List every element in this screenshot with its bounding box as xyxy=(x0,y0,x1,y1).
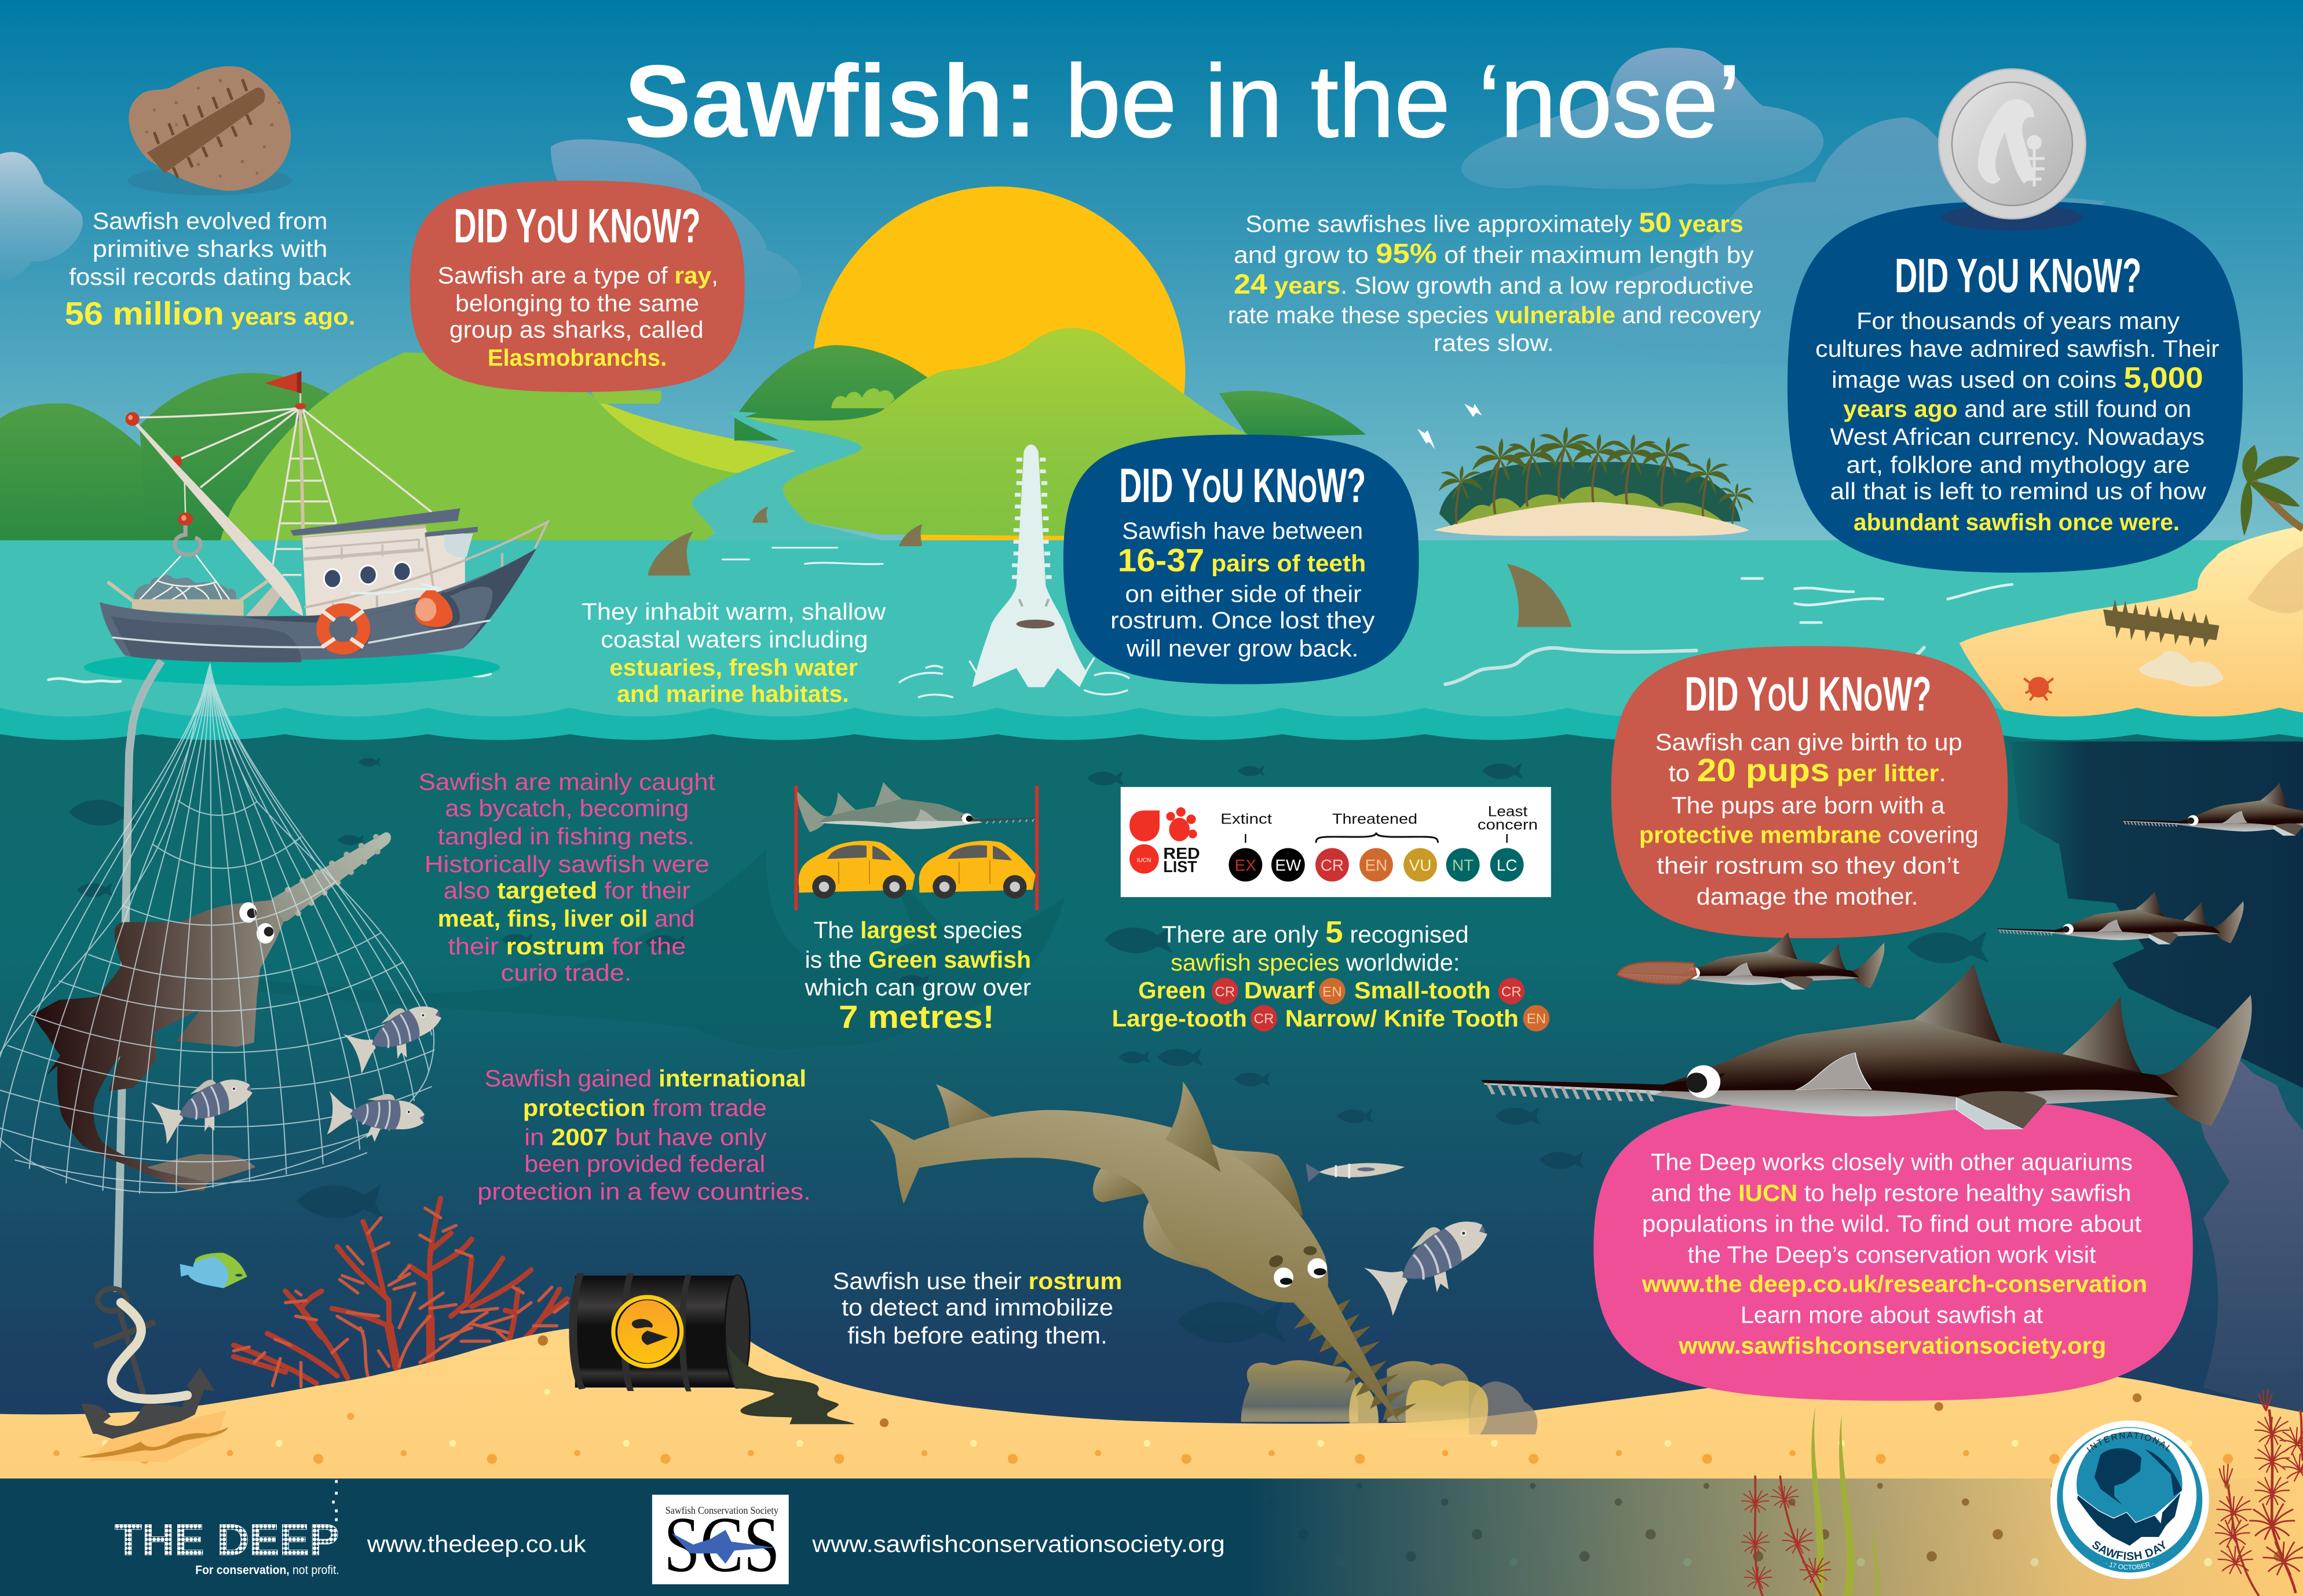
text: fossil records xyxy=(65,208,356,331)
text: rostrum use xyxy=(833,1268,1122,1349)
red list legend: EN xyxy=(1365,856,1387,874)
badge: international sawfish day: SAWFISH DAY xyxy=(2092,1540,2165,1560)
rope xyxy=(118,661,162,1292)
text: bycatch: meat, fins, liver oil and xyxy=(438,905,694,932)
text: bycatch: curio trade. xyxy=(501,960,631,986)
panel: did you know teeth: on either side of their xyxy=(1125,581,1362,607)
text: largest species: 7 metres! xyxy=(839,999,995,1035)
red list legend xyxy=(1121,787,1551,897)
red list legend: EW xyxy=(1275,856,1302,874)
rostrum fossil on beach xyxy=(2103,599,2219,647)
text: rostrum use: Sawfish use their rostrum xyxy=(833,1268,1122,1294)
panel: did you know coins: West African currency. Nowadays xyxy=(1830,423,2205,450)
rocks xyxy=(2138,651,2224,687)
text: largest species: The largest species xyxy=(814,917,1022,943)
text: protection: protection in a few countries. xyxy=(477,1178,811,1205)
sand speckles xyxy=(0,1329,2303,1596)
island xyxy=(1434,427,1754,536)
text: five species: CR xyxy=(1215,984,1235,1000)
palm shadow on beach xyxy=(2247,546,2303,613)
logo: the deep xyxy=(115,1480,339,1577)
text: fossil records: primitive sharks with xyxy=(93,236,327,262)
badge: international sawfish day xyxy=(2050,1421,2209,1579)
text: bycatch: their rostrum for the xyxy=(448,933,686,960)
text: protection: been provided federal xyxy=(524,1150,765,1177)
panel: did you know teeth: 16-37 pairs of teeth xyxy=(1118,542,1366,578)
text: lifespan: rate make these species vulnerable and recovery xyxy=(1228,302,1761,328)
text: bycatch: tangled in fishing nets. xyxy=(438,823,694,850)
text: bycatch xyxy=(419,768,715,986)
panel: did you know coins: For thousands of years many xyxy=(1856,308,2180,334)
oil spill xyxy=(728,1345,854,1424)
crab xyxy=(2024,677,2053,700)
green sawfish xyxy=(869,1082,1417,1423)
panel: did you know ray: Elasmobranchs. xyxy=(488,344,667,371)
panel: did you know ray: DID YOU KNOW? xyxy=(454,198,701,252)
footer band xyxy=(0,1478,2303,1596)
text: lifespan: and grow to 95% of their maximum length by xyxy=(1234,238,1754,269)
text: bycatch: Sawfish are mainly caught xyxy=(419,768,715,795)
text: protection xyxy=(477,1065,811,1205)
panel: did you know pups: to 20 pups per litter . xyxy=(1669,752,1946,788)
right beach xyxy=(1960,526,2303,719)
red list legend: Threatened xyxy=(1332,811,1417,827)
large sawfish xyxy=(1482,964,2252,1129)
text: habitats xyxy=(582,598,886,707)
panel: did you know pups: DID YOU KNOW? xyxy=(1684,667,1931,721)
red list legend: NT xyxy=(1452,856,1474,874)
panel: did you know pups: damage the mother. xyxy=(1697,883,1918,910)
panel: the deep conservation: the The Deep’s conservation work visit xyxy=(1688,1241,2096,1268)
text: lifespan: Some sawfishes live approximately 50 years xyxy=(1245,207,1743,239)
red list legend: LIST xyxy=(1163,858,1197,876)
clouds xyxy=(0,47,2106,365)
text: fossil records: 56 million years ago. xyxy=(65,295,356,331)
text: protection: in 2007 but have only xyxy=(524,1124,767,1151)
underwater background xyxy=(0,734,2303,1483)
panel: did you know pups: Sawfish can give birth to up xyxy=(1655,729,1962,756)
badge: international sawfish day: · 17 OCTOBER · xyxy=(2106,1562,2154,1569)
panel: did you know coins: cultures have admired sawfish. Their xyxy=(1815,335,2219,362)
panel: did you know coins: all that is left to remind us of how xyxy=(1830,478,2206,504)
sun xyxy=(812,186,1185,559)
text: habitats: coastal waters including xyxy=(601,626,868,653)
panel: did you know teeth: DID YOU KNOW? xyxy=(1119,458,1366,513)
text: protection: Sawfish gained international xyxy=(485,1065,806,1092)
fins in water xyxy=(648,507,1571,627)
red list legend: VU xyxy=(1409,856,1431,874)
panel: did you know pups: The pups are born with a xyxy=(1672,792,1945,819)
blue-grey reef xyxy=(2193,1060,2303,1417)
panel: the deep conservation: The Deep works closely with other aquariums xyxy=(1651,1149,2133,1176)
red list legend: concern xyxy=(1478,817,1538,833)
panel: the deep conservation: www.sawfishconservationsociety.org xyxy=(1678,1333,2106,1359)
seagulls xyxy=(1417,404,1482,449)
panel: did you know coins: art, folklore and mythology are xyxy=(1846,451,2190,478)
panel: did you know coins: image was used on coins 5,000 xyxy=(1832,361,2203,394)
coral xyxy=(233,1199,567,1386)
text: bycatch: Historically sawfish were xyxy=(425,851,710,877)
red list legend: Extinct xyxy=(1220,811,1272,827)
logo: the deep: THE DEEP xyxy=(115,1516,339,1565)
panel: did you know coins: abundant sawfish once were. xyxy=(1854,508,2180,535)
sea surface xyxy=(0,540,2303,746)
fishing net xyxy=(0,664,435,1194)
logo: sawfish conservation society: Sawfish Conservation Society xyxy=(666,1505,778,1516)
logo: the deep: For conservation, not profit. xyxy=(195,1562,339,1577)
panel: did you know teeth: Sawfish have between xyxy=(1122,518,1363,544)
coin xyxy=(1939,69,2086,219)
text: largest species: which can grow over xyxy=(805,974,1031,1001)
oil barrel xyxy=(569,1273,750,1392)
sawfish caught in net xyxy=(32,832,391,1191)
water ripples xyxy=(49,548,2012,684)
big shadow silhouette of sawfish xyxy=(257,848,1065,1050)
footer url: the deep: www.thedeep.co.uk xyxy=(367,1531,587,1557)
small sharks xyxy=(1617,783,2303,990)
text: fossil records: Sawfish evolved from xyxy=(93,208,327,235)
text: five species: CR xyxy=(1501,984,1522,1000)
wave bands xyxy=(0,708,2303,756)
anchor xyxy=(79,1288,229,1462)
text: five species: sawfish species worldwide: xyxy=(1171,949,1460,976)
sawfish rostrum breaching xyxy=(899,445,1129,697)
panel: did you know teeth xyxy=(1063,434,1419,684)
red water plants left xyxy=(1741,1476,1832,1596)
panel: did you know ray: belonging to the same xyxy=(455,290,699,317)
text: largest species xyxy=(805,917,1031,1035)
panel: the deep conservation: and the IUCN to help restore healthy sawfish xyxy=(1651,1180,2131,1206)
badge: international sawfish day: INTERNATIONAL xyxy=(2086,1432,2170,1452)
boat shadow xyxy=(84,649,500,686)
panel: did you know pups xyxy=(1611,646,2008,938)
text: lifespan xyxy=(1228,207,1761,356)
text: five species: Small-tooth xyxy=(1354,977,1491,1004)
text: protection: protection from trade xyxy=(523,1094,767,1121)
red water plants right xyxy=(2215,1389,2303,1596)
seaweed xyxy=(1811,1407,1880,1596)
small silver fish xyxy=(1306,1163,1405,1182)
fossil xyxy=(128,66,293,195)
text: habitats: estuaries, fresh water xyxy=(609,654,858,680)
panel: did you know ray: group as sharks, called xyxy=(449,316,704,343)
text: fossil records: fossil records dating back xyxy=(69,263,352,290)
red list legend: EX xyxy=(1235,856,1256,874)
panel: did you know ray xyxy=(410,181,745,392)
text: habitats: and marine habitats. xyxy=(617,680,849,707)
title: Sawfish: be in the ‘nose’ xyxy=(624,43,1741,159)
text: five species: EN xyxy=(1322,984,1342,1000)
text: bycatch: as bycatch, becoming xyxy=(445,795,689,822)
text: lifespan: rates slow. xyxy=(1434,330,1554,356)
text: five species: Green xyxy=(1138,977,1206,1004)
panel: the deep conservation: www.the deep.co.uk/research-conservation xyxy=(1642,1271,2147,1297)
red list legend: IUCN xyxy=(1137,857,1151,863)
red list legend: CR xyxy=(1321,856,1344,874)
hills xyxy=(0,328,1366,546)
striped fish xyxy=(149,995,1502,1320)
panel: did you know coins: years ago and are still found on xyxy=(1843,396,2191,422)
panel: the deep conservation: Learn more about sawfish at xyxy=(1741,1301,2043,1328)
text: five species: Narrow/ Knife Tooth xyxy=(1285,1005,1519,1031)
text: five species: Large-tooth xyxy=(1112,1005,1247,1031)
sky background xyxy=(0,0,2303,546)
panel: did you know ray: Sawfish are a type of ray, xyxy=(438,262,718,288)
panel: did you know teeth: will never grow back. xyxy=(1126,635,1359,661)
red list legend: RED xyxy=(1163,844,1200,862)
text: five species: CR xyxy=(1254,1011,1274,1027)
panel: the deep conservation: populations in the wild. To find out more about xyxy=(1642,1210,2141,1237)
red list legend: Least xyxy=(1488,804,1527,820)
sediment cloud xyxy=(1241,1360,1537,1437)
panel: did you know pups: protective membrane covering xyxy=(1639,821,1979,848)
silhouette fish xyxy=(69,757,1989,1343)
red list legend: LC xyxy=(1497,856,1517,874)
tropical fish xyxy=(180,1253,247,1288)
text: five species: Dwarf xyxy=(1244,977,1315,1004)
panel: the deep conservation xyxy=(1593,1097,2193,1401)
text: five species xyxy=(1112,916,1549,1031)
size comparison: sawfish over two cars xyxy=(796,782,1037,910)
palm tree xyxy=(2240,445,2303,536)
panel: did you know pups: their rostrum so they don’t xyxy=(1657,852,1960,879)
text: rostrum use: to detect and immobilize xyxy=(842,1294,1113,1321)
logo: sawfish conservation society: SCS xyxy=(664,1500,780,1588)
panel: did you know teeth: rostrum. Once lost they xyxy=(1110,607,1375,634)
panel: did you know coins xyxy=(1787,201,2243,573)
river xyxy=(692,412,881,540)
text: five species: There are only 5 recognised xyxy=(1162,916,1469,950)
text: habitats: They inhabit warm, shallow xyxy=(582,598,886,625)
fishing boat xyxy=(100,371,547,662)
text: lifespan: 24 years . Slow growth and a low reproductive xyxy=(1234,269,1754,300)
text: largest species: is the Green sawfish xyxy=(805,946,1031,973)
sand seabed xyxy=(0,1329,2303,1596)
footer url: sawfish conservation society: www.sawfishconservationsociety.org xyxy=(811,1531,1225,1557)
dark reef at upper right xyxy=(2010,741,2303,1088)
panel: did you know coins: DID YOU KNOW? xyxy=(1895,248,2141,303)
text: five species: EN xyxy=(1527,1011,1546,1027)
text: bycatch: also targeted for their xyxy=(444,877,690,904)
text: rostrum use: fish before eating them. xyxy=(847,1322,1107,1349)
